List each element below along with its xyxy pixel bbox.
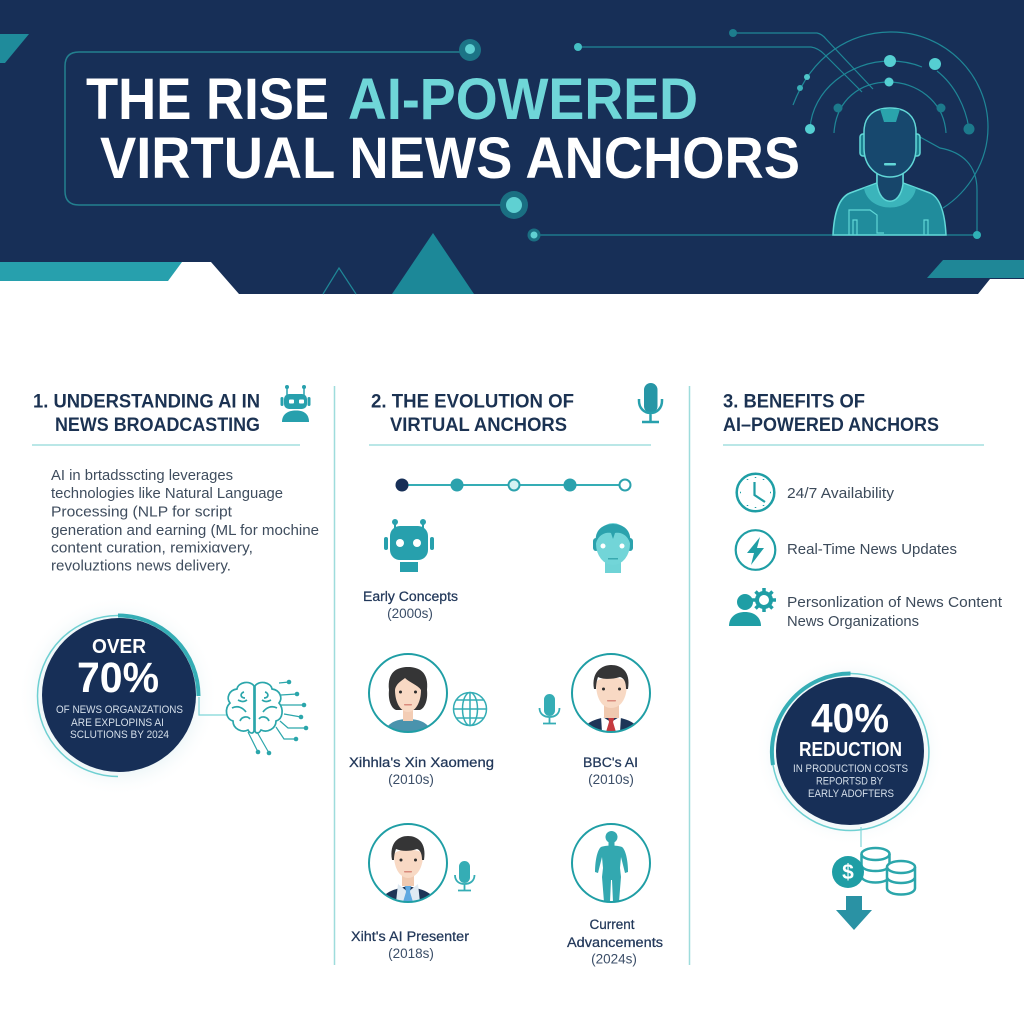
body text: content curation, remixiαvery, bbox=[51, 540, 253, 556]
portrait: current advancements bbox=[572, 824, 650, 902]
heading 1 bbox=[33, 390, 260, 436]
icon: clock bbox=[737, 474, 774, 511]
label: BBC AI: (2010s) bbox=[588, 772, 634, 787]
panel: evolution of virtual anchors bbox=[349, 383, 663, 966]
stat circle: 40%: IN PRODUCTION COSTS bbox=[793, 763, 908, 775]
connector bbox=[860, 827, 862, 847]
icon: person and gear bbox=[729, 588, 776, 626]
circuit network bbox=[528, 29, 988, 242]
heading 1: NEWS BROADCASTING bbox=[55, 414, 260, 436]
panel: understanding AI bbox=[18, 385, 319, 796]
small outline triangle bbox=[323, 268, 356, 294]
stat circle: 70% bbox=[18, 596, 218, 796]
label: current advancements: Current bbox=[589, 917, 635, 932]
portrait: Xin Xiaomeng bbox=[368, 653, 448, 733]
benefit: personalization: News Organizations bbox=[787, 614, 919, 630]
stat circle: 40%: EARLY ADOFTERS bbox=[808, 788, 894, 800]
benefit: real-time: Real-Time News Updates bbox=[787, 542, 957, 558]
body text: AI in brtadsscting leverages bbox=[51, 468, 233, 484]
stat circle: 40%: 40% bbox=[811, 695, 889, 741]
arrow: down bbox=[836, 896, 872, 930]
heading 3: AI–POWERED ANCHORS bbox=[723, 414, 939, 436]
label: current advancements: Advancements bbox=[567, 935, 663, 950]
connector bbox=[199, 697, 227, 715]
stat circle: 70%: OF NEWS ORGANZATIONS bbox=[56, 704, 183, 716]
timeline bbox=[396, 478, 630, 492]
label: early concepts: (2000s) bbox=[387, 606, 433, 621]
label: Xin Xiaomeng: (2010s) bbox=[388, 772, 434, 787]
heading 1: 1. UNDERSTANDING AI IN bbox=[33, 390, 260, 412]
icon: microphone bbox=[639, 383, 662, 422]
virtual anchor figure bbox=[833, 108, 946, 235]
teal strip left bbox=[0, 262, 182, 281]
title bbox=[86, 67, 800, 191]
icon: mic small bbox=[540, 694, 560, 724]
label: BBC AI bbox=[583, 755, 638, 787]
label: current advancements: (2024s) bbox=[591, 952, 637, 966]
body text: revoluztions news delivery. bbox=[51, 558, 231, 574]
heading 2 bbox=[371, 390, 574, 436]
stat circle: 70%: 70% bbox=[77, 654, 159, 702]
label: BBC AI: BBC's AI bbox=[583, 755, 638, 770]
icon: brain circuit bbox=[226, 680, 308, 755]
panel: benefits bbox=[723, 390, 1002, 930]
body text: technologies like Natural Language bbox=[51, 486, 283, 502]
icon: early robot bbox=[384, 519, 434, 572]
stat circle: 70%: SCLUTIONS BY 2024 bbox=[70, 729, 169, 741]
header banner bbox=[0, 0, 1024, 294]
portrait: BBC AI bbox=[571, 653, 651, 733]
body text: generation and earning (ML for mochine bbox=[51, 523, 319, 539]
label: AI presenter: (2018s) bbox=[388, 946, 434, 961]
icon: coins and dollar: $ bbox=[842, 861, 854, 884]
benefit: availability: 24/7 Availability bbox=[787, 486, 895, 502]
icon: coins and dollar bbox=[832, 848, 915, 894]
column divider bbox=[334, 386, 336, 965]
large triangle bbox=[392, 233, 474, 294]
icon: mic small 2 bbox=[455, 861, 474, 890]
title: THE RISE bbox=[86, 67, 329, 132]
teal corner shape bbox=[0, 34, 29, 63]
heading 3: 3. BENEFITS OF bbox=[723, 390, 865, 412]
stat circle: 70%: OVER bbox=[92, 636, 147, 658]
title frame with nodes bbox=[65, 39, 528, 219]
label: Xin Xiaomeng bbox=[349, 755, 494, 787]
heading 3 bbox=[723, 390, 939, 436]
body text bbox=[51, 468, 319, 574]
title: VIRTUAL NEWS ANCHORS bbox=[100, 126, 800, 191]
portrait: AI presenter bbox=[368, 823, 448, 903]
label: early concepts bbox=[363, 589, 458, 621]
icon: robot bbox=[280, 385, 310, 422]
label: Xin Xiaomeng: Xihhla's Xin Xaomeng bbox=[349, 755, 494, 770]
stat circle: 40%: REDUCTION bbox=[799, 739, 902, 761]
heading 2: VIRTUAL ANCHORS bbox=[390, 414, 567, 436]
benefit: personalization bbox=[787, 595, 1002, 630]
stat circle: 70%: ARE EXPLOPINS AI bbox=[71, 717, 164, 729]
label: current advancements bbox=[567, 917, 663, 966]
icon: humanoid head bbox=[593, 523, 633, 573]
label: early concepts: Early Concepts bbox=[363, 589, 458, 604]
icon: globe bbox=[454, 692, 486, 726]
body text: Processing (NLP for script bbox=[51, 504, 232, 520]
title: AI-POWERED bbox=[348, 67, 698, 132]
benefit: personalization: Personlization of News Content bbox=[787, 595, 1002, 611]
teal strip right bbox=[927, 260, 1024, 278]
stat circle: 40%: REPORTSD BY bbox=[816, 776, 884, 788]
label: AI presenter bbox=[351, 929, 470, 961]
icon: lightning bolt bbox=[736, 530, 775, 570]
label: AI presenter: Xiht's AI Presenter bbox=[351, 929, 470, 944]
heading 2: 2. THE EVOLUTION OF bbox=[371, 390, 574, 412]
stat circle: 40% bbox=[755, 656, 945, 846]
